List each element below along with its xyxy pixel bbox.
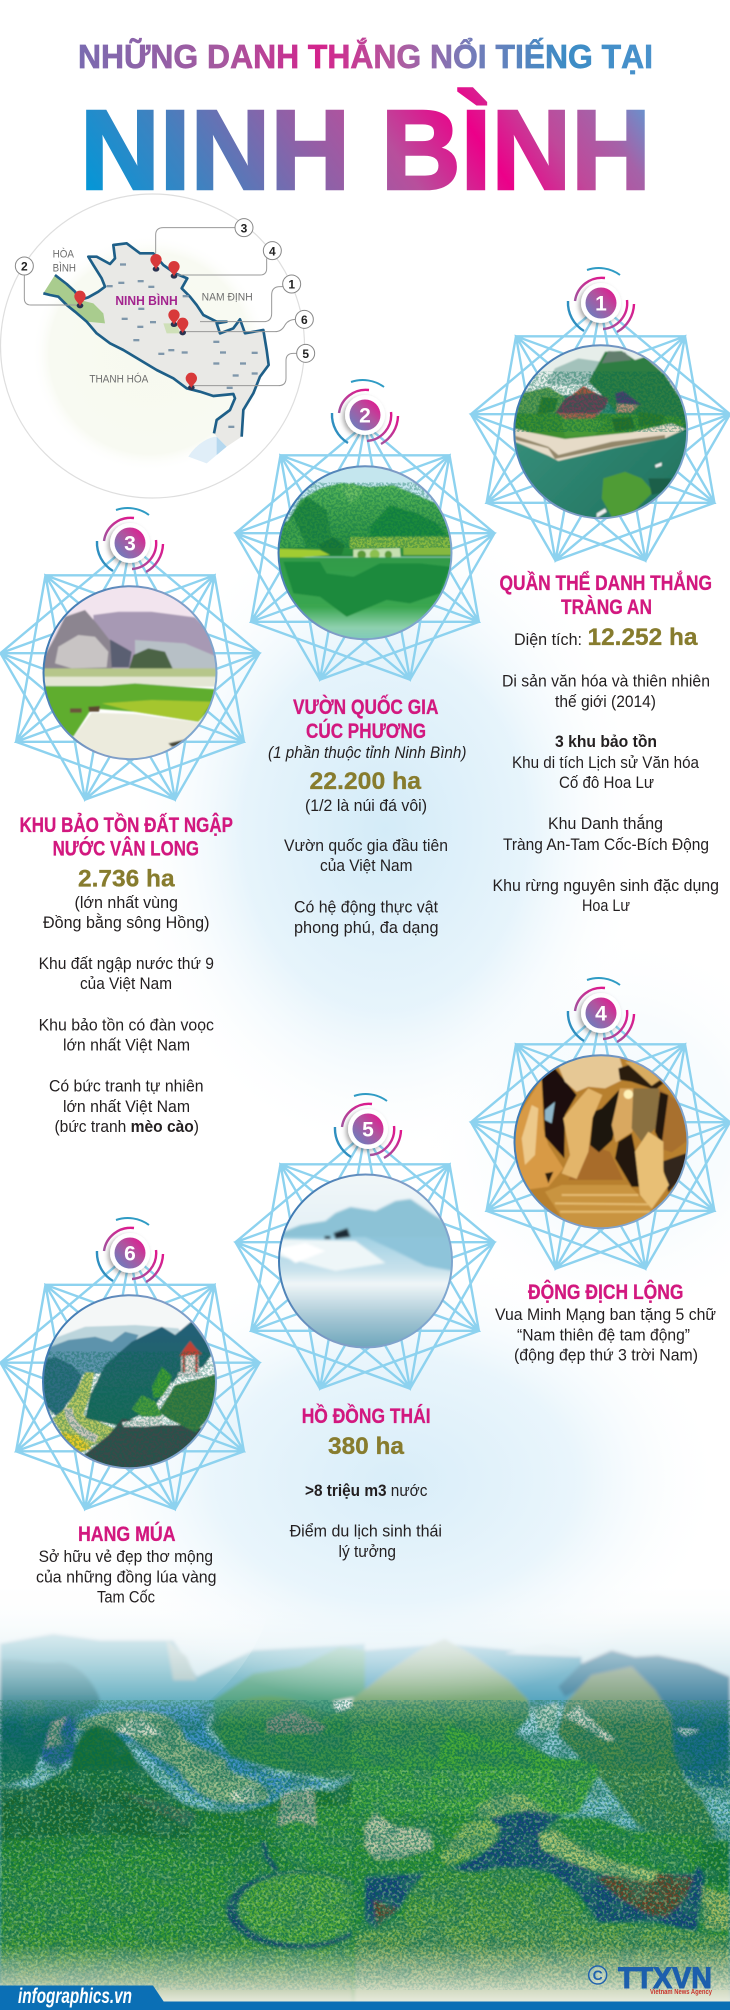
logo: TTXVN: TTXVN — [618, 1962, 712, 1995]
logo: TTXVN: C — [593, 1967, 603, 1983]
text block 6: của những đồng lúa vàng — [36, 1568, 216, 1587]
text block 6: Sở hữu vẻ đẹp thơ mộng — [39, 1547, 213, 1566]
text block 3: (lớn nhất vùng — [74, 893, 178, 912]
heading 5: HỒ ĐỒNG THÁI — [302, 1404, 431, 1428]
badge 2: 2 — [359, 404, 371, 428]
text block 1: thế giới (2014) — [555, 692, 656, 711]
text block 4 — [495, 1305, 716, 1365]
map labels: BÌNH — [53, 262, 76, 275]
text block 3: của Việt Nam — [80, 974, 172, 993]
map number markers: 6 — [301, 313, 308, 327]
map labels — [53, 248, 253, 385]
badge 6 — [97, 1218, 163, 1282]
text block 5: lý tưởng — [338, 1542, 396, 1561]
badge 1: 1 — [595, 292, 607, 316]
text block 3: lớn nhất Việt Nam — [63, 1097, 190, 1116]
text block 1: Di sản văn hóa và thiên nhiên — [502, 672, 710, 691]
text block 5 — [290, 1481, 442, 1561]
bottom landscape photo — [0, 1255, 730, 2010]
text block 2: Vườn quốc gia đầu tiên — [284, 836, 448, 855]
map number markers: 4 — [269, 244, 276, 258]
badge 3: 3 — [124, 532, 136, 556]
text block 2: Có hệ động thực vật — [294, 898, 438, 917]
map number markers: 2 — [21, 260, 28, 274]
badge 2 — [332, 380, 398, 444]
text block 3 — [39, 893, 214, 1136]
map number markers: 1 — [288, 278, 295, 292]
text block 2: của Việt Nam — [320, 856, 412, 875]
area 3: 2.736 ha — [78, 866, 175, 893]
text block 1: Khu Danh thắng — [548, 814, 663, 833]
text block 5: Điểm du lịch sinh thái — [290, 1522, 442, 1541]
heading 1: TRÀNG AN — [561, 596, 652, 619]
heading 2: VƯỜN QUỐC GIA — [293, 695, 438, 719]
heading 1 — [500, 571, 712, 619]
photo 1 — [513, 344, 688, 520]
text block 6 — [36, 1547, 216, 1607]
map labels: NAM ĐỊNH — [202, 292, 253, 304]
title line 2: NINH BÌNH — [80, 87, 651, 213]
heading 3: NƯỚC VÂN LONG — [53, 837, 199, 861]
map number markers: 5 — [302, 347, 309, 361]
text block 2 — [284, 796, 448, 937]
map labels: NINH BÌNH — [115, 293, 178, 308]
text block 1: Hoa Lư — [582, 896, 630, 915]
map pins — [74, 254, 197, 390]
heading 3: KHU BẢO TỒN ĐẤT NGẬP — [20, 813, 233, 837]
text block 3: lớn nhất Việt Nam — [63, 1036, 190, 1055]
location map — [0, 194, 315, 498]
badge 1 — [568, 268, 634, 332]
area 1: 12.252 ha — [588, 624, 698, 651]
footer bar — [0, 1985, 730, 2010]
text block 3: (bức tranh mèo cào) — [54, 1117, 199, 1136]
badge 3 — [97, 508, 163, 572]
panel: site 4 Địch Lộng — [471, 978, 730, 1365]
area 1: Diện tích: — [514, 630, 582, 649]
star frame 2 — [236, 424, 494, 680]
map labels: THANH HÓA — [89, 372, 149, 385]
photo 2 — [278, 465, 452, 640]
map number markers: 3 — [241, 221, 248, 235]
panel: site 5 Đồng Thái — [236, 1094, 494, 1561]
map number markers — [15, 219, 315, 362]
panel: site 6 Hang Múa — [0, 1218, 260, 1607]
text block 1 — [492, 672, 719, 915]
text block 1: Khu rừng nguyên sinh đặc dụng — [492, 876, 719, 895]
area 2: 22.200 ha — [310, 768, 422, 795]
text block 6: Tam Cốc — [97, 1588, 155, 1607]
heading 2 — [293, 695, 438, 743]
text block 3: Khu đất ngập nước thứ 9 — [39, 954, 214, 973]
badge 5: 5 — [362, 1118, 374, 1142]
heading 2: CÚC PHƯƠNG — [306, 719, 426, 743]
heading 6: HANG MÚA — [78, 1522, 176, 1546]
text block 4: “Nam thiên đệ tam động” — [517, 1326, 690, 1345]
badge 4: 4 — [595, 1002, 607, 1026]
text block 3: Có bức tranh tự nhiên — [49, 1077, 204, 1096]
badge 4 — [568, 978, 634, 1042]
area 1 — [514, 624, 698, 651]
logo: TTXVN: Vietnam News Agency — [650, 1989, 712, 1996]
star frame 3 — [0, 544, 260, 800]
panel: site 2 Cúc Phương — [236, 380, 494, 937]
text block 4: (động đẹp thứ 3 trời Nam) — [514, 1346, 698, 1365]
map labels: HÒA — [53, 248, 74, 261]
text block 1: Khu di tích Lịch sử Văn hóa — [512, 753, 699, 772]
note 2: (1 phần thuộc tỉnh Ninh Bình) — [268, 743, 466, 762]
heading 4: ĐỘNG ĐỊCH LỘNG — [528, 1280, 684, 1304]
area 5: 380 ha — [328, 1433, 405, 1460]
photo 6 — [42, 1294, 217, 1470]
badge 6: 6 — [124, 1242, 136, 1266]
text block 1: 3 khu bảo tồn — [555, 732, 657, 751]
text block 3: Khu bảo tồn có đàn voọc — [39, 1016, 214, 1035]
star frame 5 — [236, 1134, 494, 1389]
panel: site 3 Vân Long — [0, 508, 260, 1136]
badge 5 — [335, 1094, 401, 1158]
star frame 1 — [471, 306, 730, 561]
star frame 6 — [0, 1254, 260, 1509]
heading 3 — [20, 813, 233, 861]
text block 4: Vua Minh Mạng ban tặng 5 chữ — [495, 1305, 716, 1324]
photo 5 — [278, 1174, 453, 1348]
text block 3: Đồng bằng sông Hồng) — [43, 913, 210, 932]
text block 2: (1/2 là núi đá vôi) — [305, 796, 427, 815]
photo 4 — [514, 1054, 688, 1230]
text block 5: >8 triệu m3 nước — [305, 1481, 428, 1500]
text block 1: Tràng An-Tam Cốc-Bích Động — [503, 835, 709, 854]
footer site name: infographics.vn — [18, 1985, 132, 2008]
text block 2: phong phú, đa dạng — [294, 918, 438, 937]
text block 1: Cố đô Hoa Lư — [559, 773, 654, 792]
panel: site 1 Tràng An — [471, 268, 730, 915]
photo 3 — [42, 585, 218, 760]
star frame 4 — [471, 1014, 730, 1269]
title line 1: NHỮNG DANH THẮNG NỔI TIẾNG TẠI — [78, 38, 653, 75]
